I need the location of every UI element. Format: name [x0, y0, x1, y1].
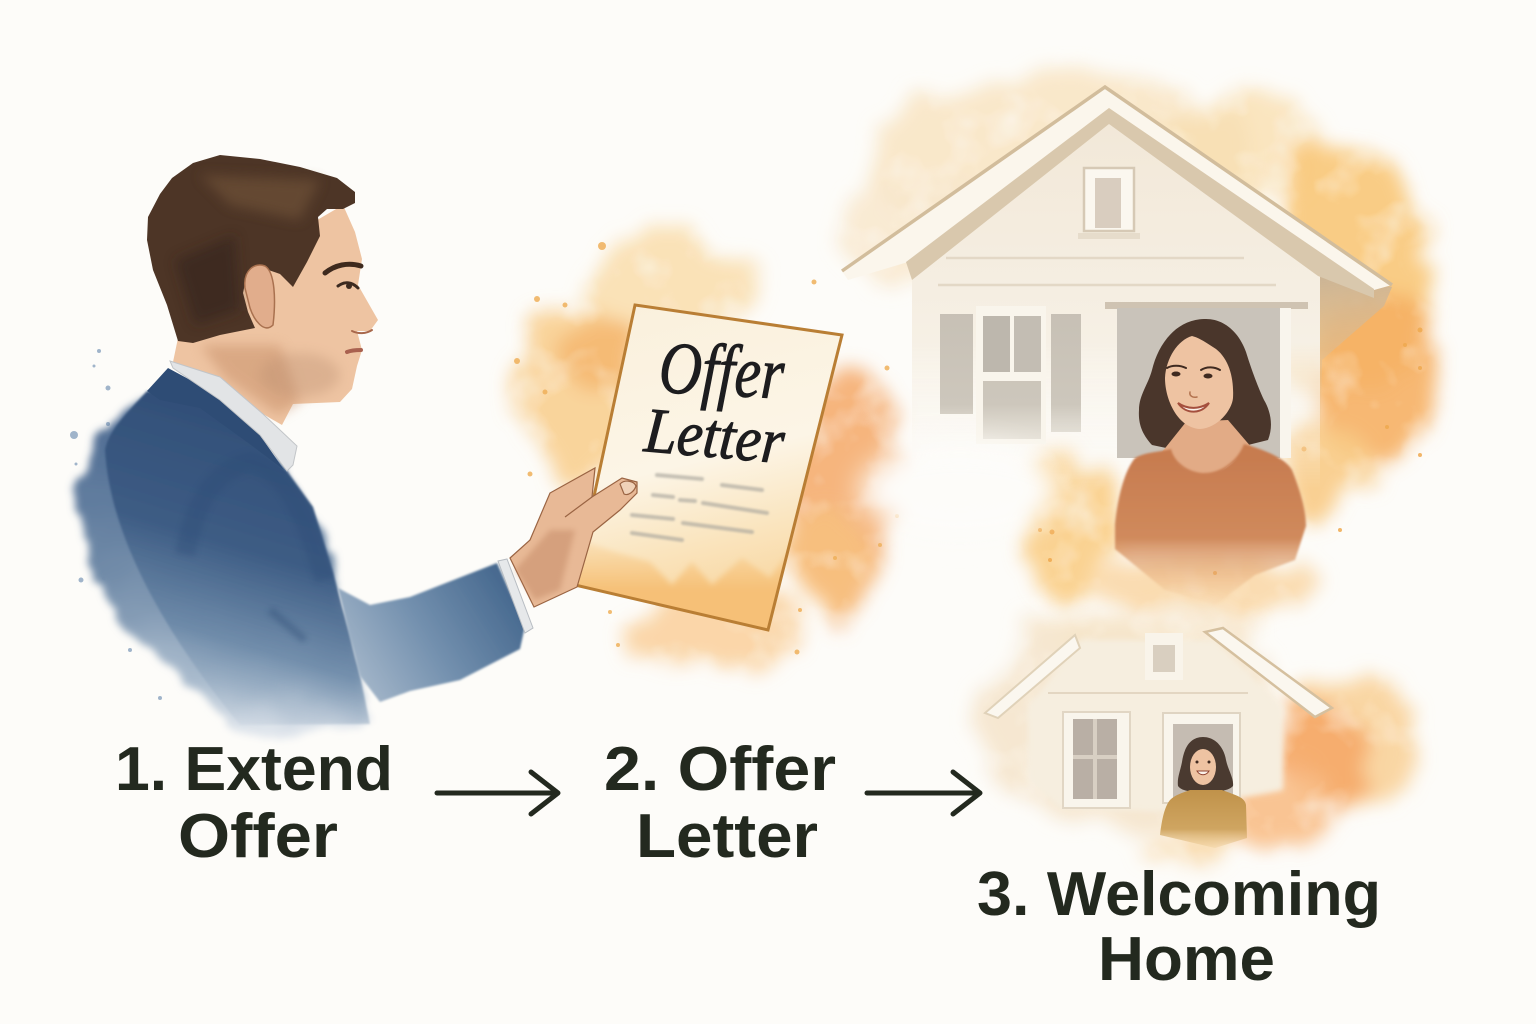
woman eyes, nose and smile: [1167, 366, 1220, 412]
small woman eyes: [1196, 760, 1210, 764]
jacket body: [105, 391, 370, 725]
neck shadow: [200, 345, 300, 415]
label: step 3: Home: [1098, 925, 1275, 994]
left roof board: [985, 635, 1080, 718]
letter handwriting: [641, 327, 788, 477]
small woman: [1160, 737, 1247, 848]
paint splatter dots: [514, 242, 899, 654]
letter body lines: [632, 475, 767, 540]
sleeve: [338, 563, 525, 702]
small woman face: [1190, 749, 1216, 785]
arrow: step 2 to step 3: [867, 772, 980, 814]
jaw shading: [260, 353, 340, 397]
hair shadow: [175, 235, 240, 325]
small house window: [1063, 712, 1130, 808]
small house wall: [1028, 640, 1283, 812]
porch pillar: [1280, 308, 1291, 458]
label: step 1: 1. Extend: [115, 735, 393, 804]
soffit: [906, 108, 1374, 298]
label: step 1: [115, 735, 393, 871]
outer roof line: [842, 87, 1392, 285]
step 2: offer letter: [510, 305, 842, 640]
step 3: large house with woman: [842, 75, 1437, 621]
jacket lapel collar: [147, 368, 284, 470]
label: step 3: [977, 860, 1381, 994]
orange wash behind offer letter: [514, 233, 899, 669]
hair highlight: [200, 175, 320, 220]
hand shading: [515, 530, 575, 600]
house wall: [912, 120, 1320, 490]
letter border: [575, 305, 842, 630]
neck and face skin: [173, 205, 378, 425]
right shutter: [1051, 314, 1081, 432]
jacket faded watercolor layer: [67, 391, 368, 738]
house window: [976, 306, 1046, 444]
attic window: [1078, 168, 1140, 239]
ear: [245, 265, 274, 328]
hair: [147, 155, 355, 343]
right roof board: [1205, 628, 1332, 717]
woman: [1115, 319, 1306, 605]
arrow: step 1 to step 2: [437, 772, 558, 814]
small house roof: [985, 628, 1332, 718]
letter lower wash: [578, 543, 785, 628]
letter sheet: [575, 305, 842, 630]
small door: [1163, 713, 1240, 803]
label: step 2: Letter: [636, 802, 818, 871]
woman sweater: [1115, 444, 1306, 605]
small woman sweater: [1160, 790, 1247, 848]
letter handwriting: Letter: [641, 394, 788, 477]
fade under house: [860, 445, 1060, 535]
label: step 2: 2. Offer: [604, 735, 836, 804]
label: step 3: 3. Welcoming: [977, 860, 1381, 929]
thumb crease and nail: [565, 481, 636, 517]
woman face: [1165, 336, 1233, 429]
siding boards: [938, 258, 1276, 285]
siding line: [1048, 692, 1248, 694]
woman hair: [1139, 319, 1271, 449]
hand holding letter: [510, 468, 637, 607]
small woman hair: [1178, 737, 1233, 792]
splatter dots: [1038, 328, 1422, 575]
porch door opening: [1117, 308, 1280, 458]
fascia board: [842, 88, 1392, 290]
eye, brow, nose and lips: [325, 264, 372, 352]
watercolor wash: [980, 612, 1407, 859]
step 1: man in blue jacket: [67, 155, 533, 738]
woman neck: [1162, 420, 1252, 484]
roof: [842, 87, 1392, 298]
porch beam: [1105, 302, 1308, 309]
jacket fold shading: [185, 462, 325, 640]
letter handwriting: Offer: [657, 327, 787, 416]
label: step 1: Offer: [178, 802, 338, 871]
shirt cuff: [498, 559, 533, 633]
orange watercolor wash: [845, 75, 1437, 621]
small attic window: [1145, 633, 1183, 680]
blue paint splatter: [70, 349, 162, 700]
shirt collar: [170, 361, 297, 471]
step 3: small house with woman: [980, 612, 1407, 859]
side wall: [1320, 272, 1392, 460]
label: step 2: [604, 735, 836, 871]
small woman smile: [1197, 771, 1209, 775]
left shutter: [940, 314, 973, 414]
